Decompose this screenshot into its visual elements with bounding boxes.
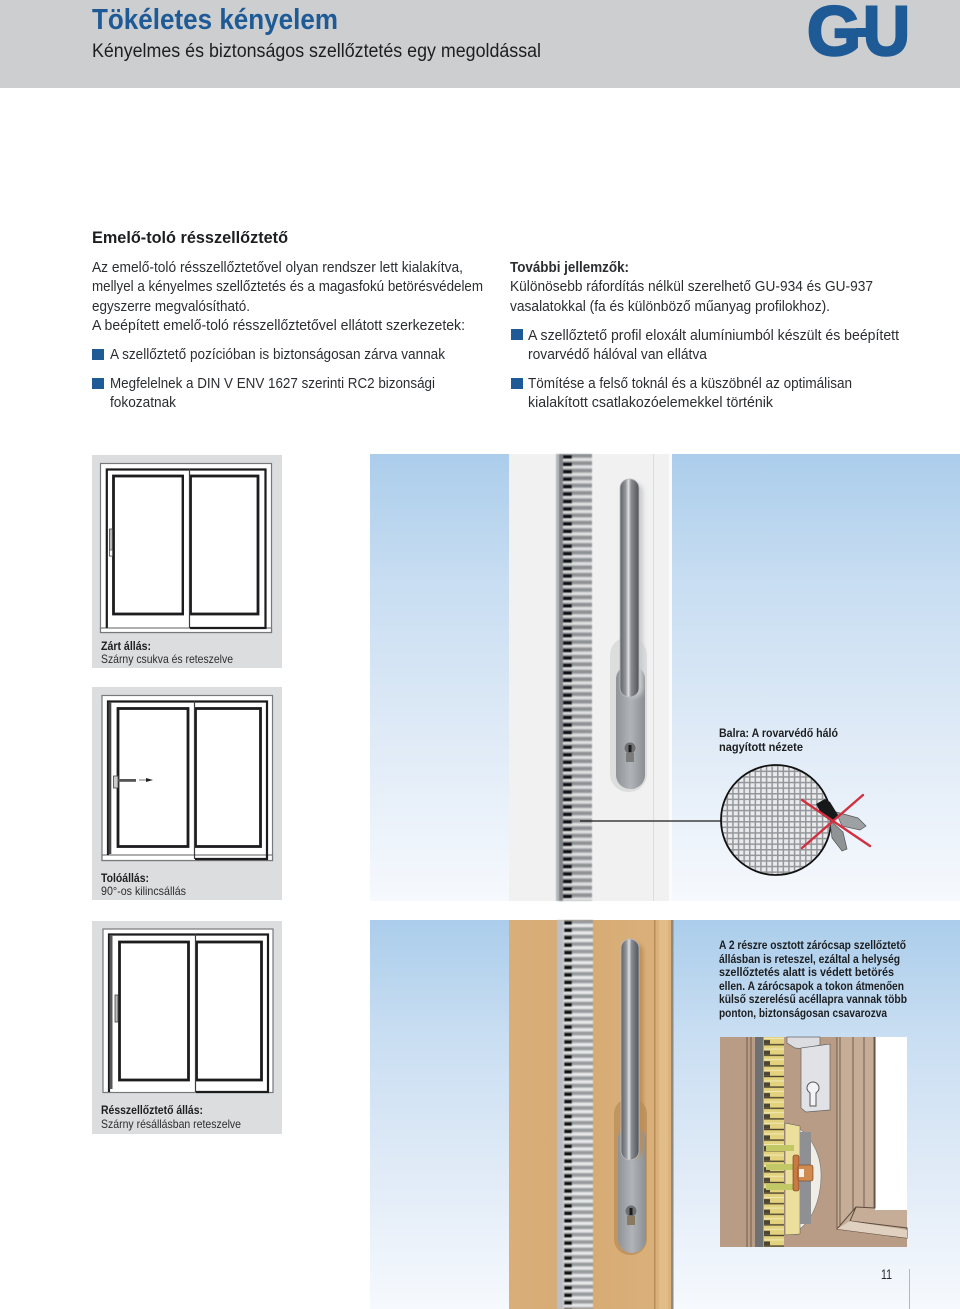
caption: partial ventilation <box>101 1104 241 1131</box>
callout: two-part locking pin: szellőztetés alatt is védett betörés <box>719 966 894 979</box>
callout: two-part locking pin: ponton, biztonságosan csavarozva <box>719 1007 887 1020</box>
callout: two-part locking pin <box>719 939 907 1020</box>
page number: 11 <box>881 1266 892 1282</box>
callout: two-part locking pin: ellen. A zárócsapok a tokon átmenően <box>719 980 904 993</box>
intro paragraph <box>92 260 483 334</box>
keyhole <box>626 1206 636 1225</box>
bullet: locked in ventilation position: A szellőztető pozícióban is biztonságosan zárva vannak <box>110 347 446 363</box>
window diagram: closed <box>100 464 272 632</box>
caption: closed <box>101 640 233 666</box>
white frame <box>509 454 672 901</box>
handle plate <box>610 637 647 792</box>
panel: sliding position <box>92 687 282 900</box>
photo: white window frame with vent <box>370 454 960 901</box>
red cross <box>802 795 870 848</box>
title: Tökéletes kényelem <box>92 4 338 36</box>
window diagram: sliding <box>102 696 272 860</box>
callout: two-part locking pin: A 2 részre osztott zárócsap szellőztető <box>719 939 906 952</box>
bullet: sealing: kialakított csatlakozóelemekkel történik <box>528 395 774 411</box>
page number <box>881 1266 910 1309</box>
further features paragraph <box>510 260 873 315</box>
intro paragraph: mellyel a kényelmes szellőztetés és a magasfokú betörésvédelem <box>92 279 483 295</box>
caption: closed: Szárny csukva és reteszelve <box>101 653 233 666</box>
locking pin <box>793 1155 813 1191</box>
left text column <box>92 260 483 411</box>
panel: closed position <box>92 455 282 668</box>
handle plate <box>614 1098 647 1255</box>
subtitle: Kényelmes és biztonságos szellőztetés egy megoldással <box>92 41 541 62</box>
caption: partial ventilation: Szárny résállásban reteszelve <box>101 1118 241 1131</box>
caption: partial ventilation: Résszellőztető állás: <box>101 1104 203 1117</box>
photo: wood window frame with vent <box>370 920 960 1309</box>
intro paragraph: A beépített emelő-toló résszellőztetővel ellátott szerkezetek: <box>92 318 465 334</box>
right text column <box>510 260 899 411</box>
callout: insect screen <box>719 727 838 754</box>
further features paragraph: Különösebb ráfordítás nélkül szerelhető GU-934 és GU-937 <box>510 279 873 295</box>
bullet: anodised profile: rovarvédő hálóval van ellátva <box>528 347 708 363</box>
callout: insect screen: Balra: A rovarvédő háló <box>719 727 838 740</box>
bullet: anodised profile <box>511 328 899 363</box>
further features paragraph: vasalatokkal (fa és különböző műanyag profilokhoz). <box>510 299 830 315</box>
bullet: RC2 class: Megfelelnek a DIN V ENV 1627 szerinti RC2 bizonsági <box>110 376 435 392</box>
handle bar <box>621 939 643 1160</box>
section heading: Emelő-toló résszellőztető <box>92 228 288 247</box>
logo: G-U <box>807 0 910 70</box>
caption: sliding: Tolóállás: <box>101 872 149 885</box>
bullet: sealing: Tömítése a felső toknál és a küszöbnél az optimálisan <box>528 376 852 392</box>
callout: two-part locking pin: külső szerelésű acéllapra vannak több <box>719 993 907 1006</box>
caption: closed: Zárt állás: <box>101 640 151 653</box>
header band <box>0 0 960 88</box>
intro paragraph: egyszerre megvalósítható. <box>92 299 250 315</box>
bullet: RC2 class: fokozatnak <box>110 395 177 411</box>
caption: sliding <box>101 872 186 898</box>
keyhole <box>624 742 636 762</box>
technical drawing: locking pin detail <box>720 1037 907 1247</box>
vent strip <box>556 454 592 901</box>
further features paragraph: További jellemzők: <box>510 260 629 276</box>
strike plate cut-out <box>766 1123 821 1235</box>
bullet: RC2 class <box>92 376 435 411</box>
magnified mesh circle <box>721 765 831 875</box>
callout: two-part locking pin: állásban is reteszel, ezáltal a helység <box>719 953 900 966</box>
caption: sliding: 90°-os kilincsállás <box>101 885 186 898</box>
handle bar <box>620 479 643 697</box>
icon: fly <box>816 799 866 851</box>
window diagram: partial ventilation <box>103 929 273 1092</box>
panel: partial ventilation position <box>92 921 282 1134</box>
bullet: anodised profile: A szellőztető profil eloxált alumíniumból készült és beépített <box>528 328 899 344</box>
bullet: sealing <box>511 376 852 411</box>
handle plate drawing <box>787 1037 830 1112</box>
vent strip <box>557 920 593 1309</box>
callout: insect screen: nagyított nézete <box>719 741 804 754</box>
intro paragraph: Az emelő-toló résszellőztetővel olyan rendszer lett kialakítva, <box>92 260 463 276</box>
wood frame <box>509 920 674 1309</box>
connector line to magnifier <box>580 820 722 822</box>
